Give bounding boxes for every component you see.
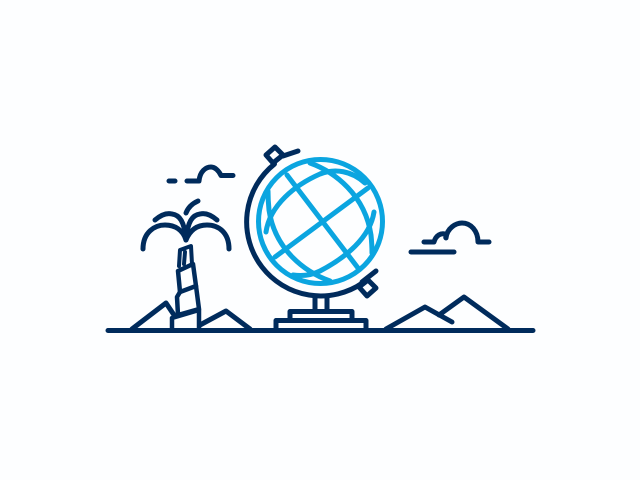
right dune — [200, 311, 250, 329]
bottom pivot — [359, 280, 376, 296]
top pivot — [266, 147, 283, 163]
mountains: right — [386, 307, 452, 329]
icon: globe — [258, 160, 382, 284]
left dune — [132, 303, 174, 329]
ground line — [108, 328, 533, 333]
cloud: left — [169, 167, 233, 181]
fronds — [143, 225, 186, 249]
clouds and mountains — [169, 167, 508, 329]
icon: palm tower and dunes — [132, 201, 250, 329]
base — [290, 312, 352, 319]
neck — [315, 297, 327, 310]
tower — [179, 246, 192, 266]
cloud: right — [424, 223, 489, 242]
meridian arc — [247, 164, 362, 296]
globe stand — [247, 147, 376, 329]
